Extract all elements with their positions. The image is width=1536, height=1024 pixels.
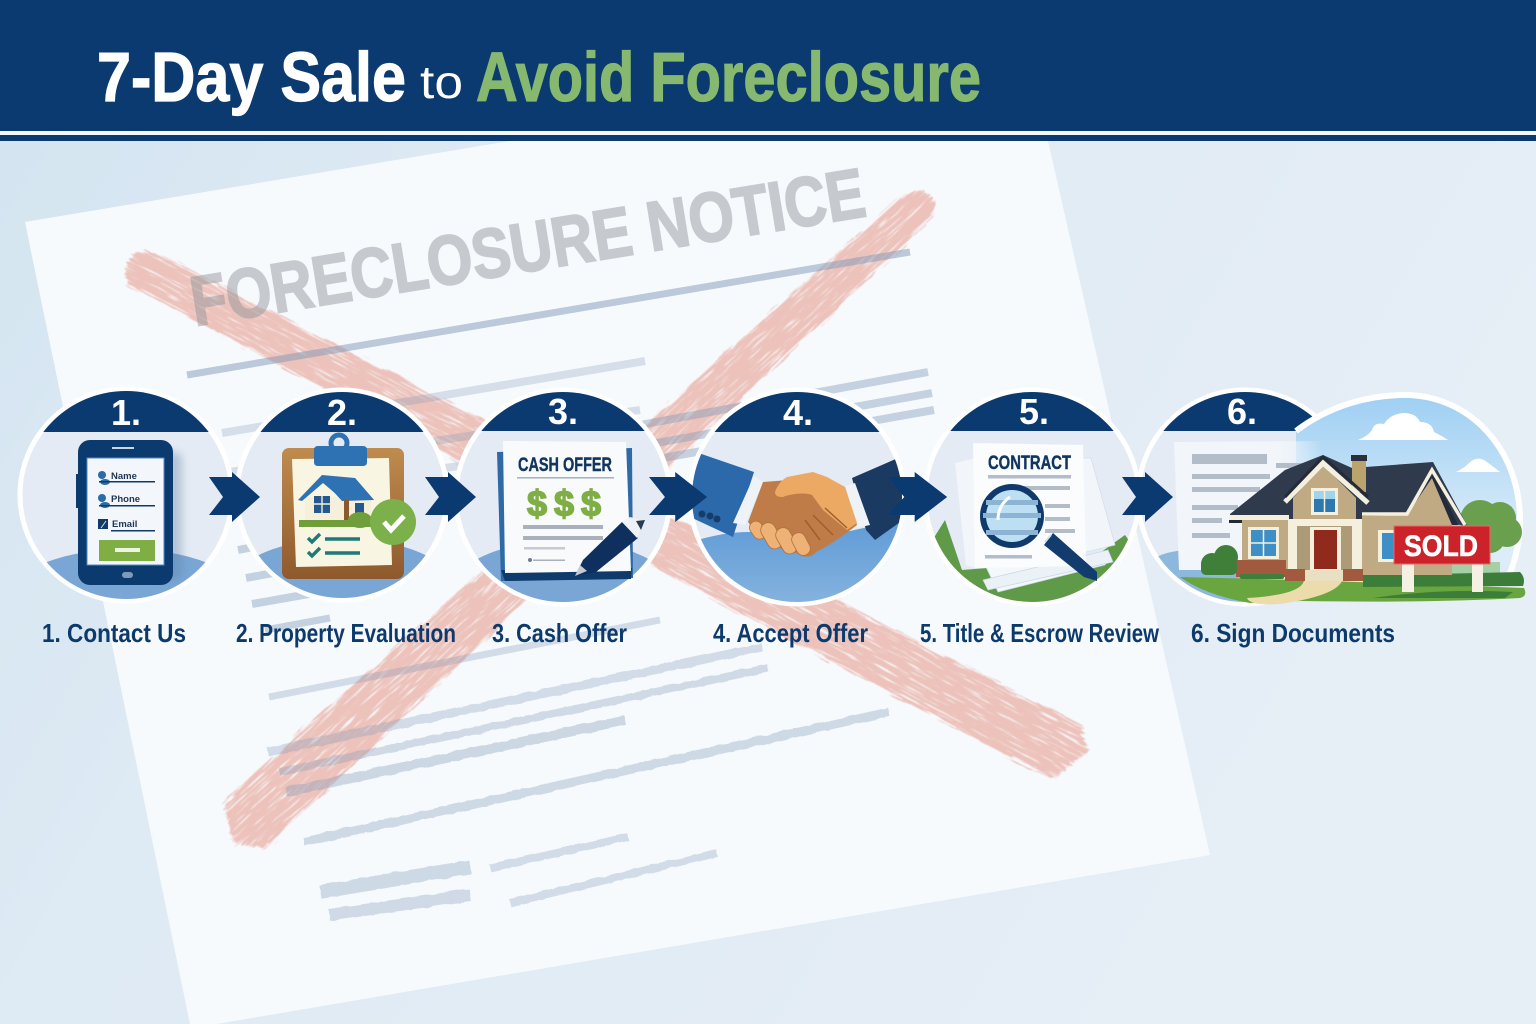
- title: 7-Day Sale: [97, 38, 406, 116]
- label 6: 6. Sign Documents: [1191, 618, 1395, 648]
- step 2: property evaluation: [236, 388, 447, 598]
- icon: right sleeve: [852, 459, 902, 540]
- roof: [1230, 455, 1467, 525]
- icon: phone form: Name: [111, 471, 137, 482]
- arrow 4: [888, 472, 947, 522]
- red X: [114, 172, 1097, 862]
- step 3: cash offer: [456, 392, 670, 602]
- header band: [0, 0, 1536, 141]
- sold sign: [1394, 526, 1490, 592]
- sky disc: [1296, 395, 1520, 585]
- sold house scene: [1180, 413, 1525, 604]
- step 4: accept offer: [691, 389, 902, 606]
- document text lines: [187, 252, 934, 915]
- step 6: sign documents: [1136, 388, 1523, 606]
- paper sheet: [25, 141, 1210, 1024]
- number: 6.: [1227, 391, 1257, 432]
- icon: cash offer document with pen: [497, 441, 645, 581]
- shrubs: [1201, 545, 1284, 579]
- ring: [1296, 395, 1520, 585]
- icon: left sleeve: [690, 450, 754, 537]
- icon: phone form: Phone: [111, 494, 140, 505]
- number: 3.: [548, 391, 578, 432]
- label 3: 3. Cash Offer: [492, 618, 627, 648]
- label 5: 5. Title & Escrow Review: [920, 618, 1160, 648]
- number: 2.: [327, 392, 357, 433]
- label 2: 2. Property Evaluation: [236, 618, 456, 648]
- front gable: [1293, 465, 1356, 522]
- clouds: [1358, 413, 1500, 472]
- lawn: [1180, 577, 1525, 603]
- icon: contract pages with magnifier: [955, 443, 1115, 592]
- sold sign: SOLD: [1404, 530, 1478, 563]
- number: 1.: [111, 392, 141, 433]
- title: to: [420, 56, 463, 108]
- number: 5.: [1019, 391, 1049, 432]
- step 5: title and escrow review: [928, 392, 1138, 602]
- porch: [1288, 519, 1362, 526]
- windows: [1248, 488, 1398, 562]
- title: Avoid Foreclosure: [476, 38, 981, 116]
- icon: signed document: [1174, 441, 1322, 570]
- icon: handshake: [698, 472, 870, 558]
- icon: clipboard with house: [282, 435, 416, 579]
- label 4: 4. Accept Offer: [713, 618, 868, 648]
- step 1: contact us: [18, 391, 232, 601]
- label 1: 1. Contact Us: [42, 618, 186, 648]
- arrow 3: [649, 472, 707, 522]
- icon: phone form: Email: [112, 519, 137, 530]
- document heading: FORECLOSURE NOTICE: [185, 154, 870, 341]
- arrow 1: [209, 472, 260, 522]
- arrow 2: [425, 472, 476, 522]
- trees: [1460, 500, 1522, 553]
- hedge: [1363, 566, 1524, 587]
- left wing wall: [1242, 520, 1292, 570]
- title: [97, 38, 981, 116]
- number: 4.: [783, 392, 813, 433]
- icon: phone form: [76, 440, 173, 585]
- icon: cash offer document with pen: CASH OFFER: [518, 455, 612, 476]
- chimney: [1352, 458, 1366, 492]
- arrow 5: [1122, 472, 1173, 522]
- door: [1310, 527, 1341, 570]
- right gable and walls: [1362, 478, 1452, 575]
- icon: contract pages with magnifier: CONTRACT: [988, 453, 1071, 474]
- foreclosure notice document: [25, 141, 1210, 1024]
- icon: cash offer document with pen: $$$: [527, 483, 601, 524]
